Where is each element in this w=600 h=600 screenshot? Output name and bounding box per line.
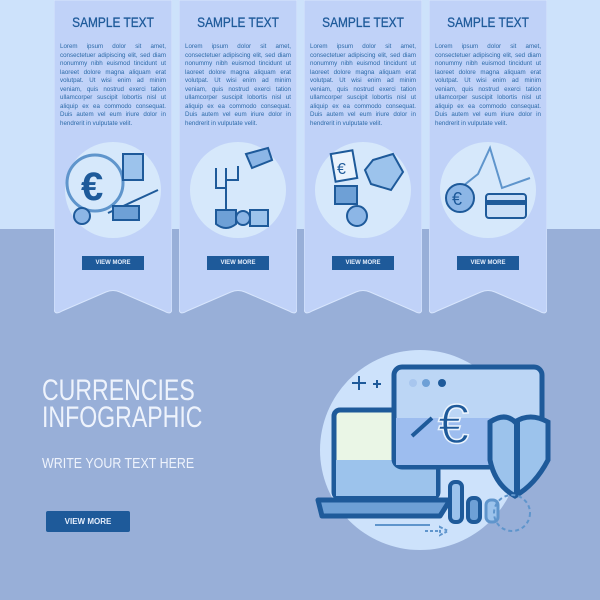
heading: SAMPLE TEXT — [447, 15, 529, 30]
icon: money plant — [190, 142, 286, 238]
icon: globe euro — [65, 142, 161, 238]
body text: Lorem ipsum dolor sit amet, consectetuer adipiscing elit, sed diam nonummy nibh euismod tincidunt ut laoreet dolore magna aliquam erat volutpat. Ut wisi enim ad minim veniam, quis nostrud exerci tation ullamcorper suscipit lobortis nisl ut aliquip ex ea commodo consequat. Duis autem vel eum iriure dolor in hendrerit in vulputate velit. — [60, 43, 166, 126]
icon: chart card coin: € — [452, 189, 462, 209]
banner 3 — [304, 0, 422, 314]
button — [207, 256, 269, 270]
body text: Lorem ipsum dolor sit amet, consectetuer adipiscing elit, sed diam nonummy nibh euismod tincidunt ut laoreet dolore magna aliquam erat volutpat. Ut wisi enim ad minim veniam, quis nostrud exerci tation ullamcorper suscipit lobortis nisl ut aliquip ex ea commodo consequat. Duis autem vel eum iriure dolor in hendrerit in vulputate velit. — [435, 43, 541, 126]
main illustration: computer with euro: € — [438, 392, 469, 455]
banner 2 — [179, 0, 297, 314]
button — [332, 256, 394, 270]
button: VIEW MORE — [95, 260, 130, 266]
body text: Lorem ipsum dolor sit amet, consectetuer adipiscing elit, sed diam nonummy nibh euismod tincidunt ut laoreet dolore magna aliquam erat volutpat. Ut wisi enim ad minim veniam, quis nostrud exerci tation ullamcorper suscipit lobortis nisl ut aliquip ex ea commodo consequat. Duis autem vel eum iriure dolor in hendrerit in vulputate velit. — [185, 43, 291, 126]
button: VIEW MORE — [345, 260, 380, 266]
title — [42, 374, 202, 434]
banner 1 — [54, 0, 172, 314]
title: INFOGRAPHIC — [42, 401, 202, 434]
icon: chart card coin — [440, 142, 536, 238]
icon: globe euro: € — [81, 165, 103, 209]
icon: hand euro award — [315, 142, 411, 238]
body text: Lorem ipsum dolor sit amet, consectetuer adipiscing elit, sed diam nonummy nibh euismod tincidunt ut laoreet dolore magna aliquam erat volutpat. Ut wisi enim ad minim veniam, quis nostrud exerci tation ullamcorper suscipit lobortis nisl ut aliquip ex ea commodo consequat. Duis autem vel eum iriure dolor in hendrerit in vulputate velit. — [310, 43, 416, 126]
main illustration: computer with euro — [316, 350, 550, 550]
heading: SAMPLE TEXT — [72, 15, 154, 30]
banner 4 — [429, 0, 547, 314]
heading: SAMPLE TEXT — [322, 15, 404, 30]
subtitle: WRITE YOUR TEXT HERE — [42, 455, 194, 472]
icon: hand euro award: € — [337, 161, 346, 178]
button: VIEW MORE — [470, 260, 506, 266]
button — [82, 256, 144, 270]
button: VIEW MORE — [220, 260, 256, 266]
heading: SAMPLE TEXT — [197, 15, 279, 30]
title: CURRENCIES — [42, 374, 195, 407]
main button — [46, 511, 130, 532]
main button: VIEW MORE — [65, 517, 111, 526]
button — [457, 256, 519, 270]
